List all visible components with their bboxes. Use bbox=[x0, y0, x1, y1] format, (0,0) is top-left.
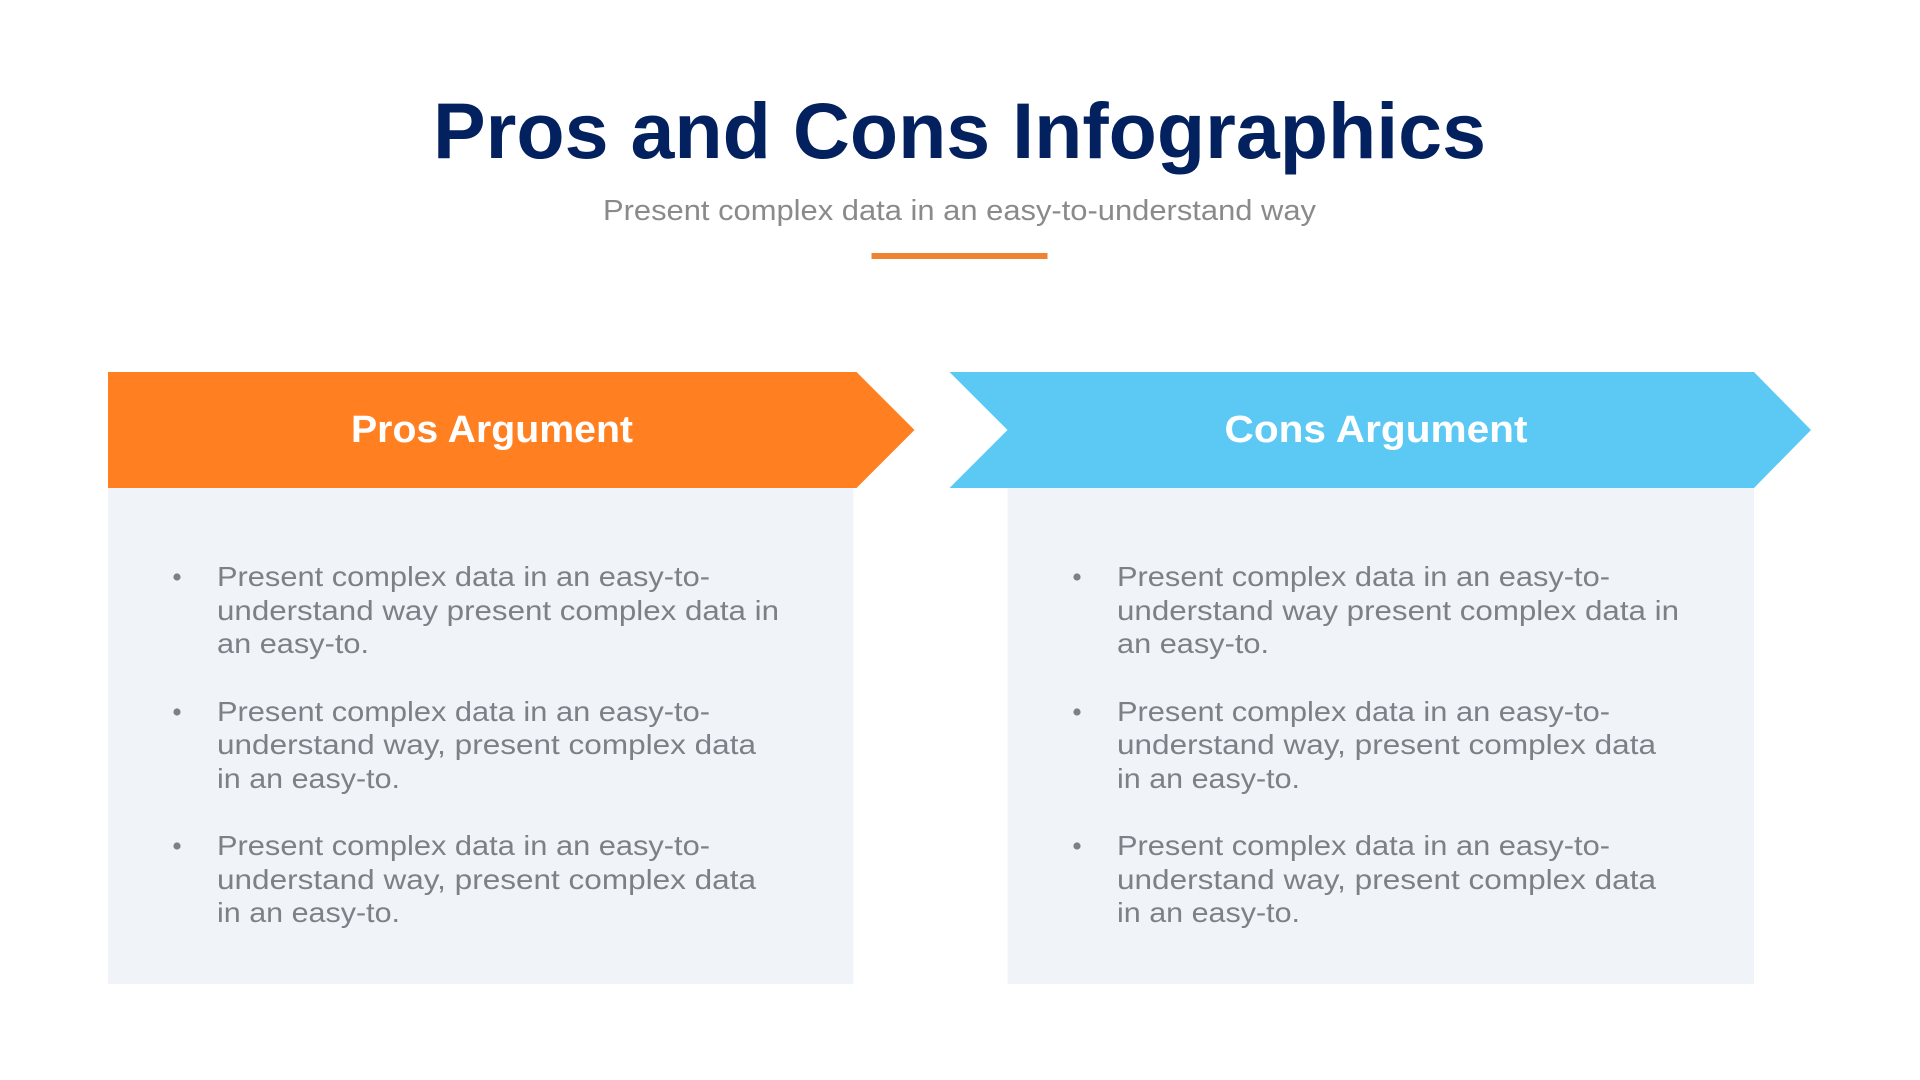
cons bullet 2 bbox=[1073, 696, 1656, 794]
cons bullet 3 bbox=[1073, 830, 1656, 928]
cons bullet 3: Present complex data in an easy-to- bbox=[1117, 830, 1610, 861]
pros body panel bbox=[108, 488, 854, 984]
cons bullet 1: an easy-to. bbox=[1117, 628, 1269, 659]
pros bullet 1: Present complex data in an easy-to- bbox=[217, 561, 710, 592]
pros arrow header bbox=[108, 372, 914, 488]
cons bullet 2: Present complex data in an easy-to- bbox=[1117, 696, 1610, 727]
pros bullet 2 bbox=[173, 696, 756, 794]
pros bullet 2: in an easy-to. bbox=[217, 763, 400, 794]
cons bullet 3: in an easy-to. bbox=[1117, 897, 1300, 928]
title underline accent bbox=[872, 253, 1048, 259]
pros bullet 1: understand way present complex data in bbox=[217, 595, 779, 626]
cons bullet 1 bbox=[1073, 561, 1679, 659]
cons bullet 1: Present complex data in an easy-to- bbox=[1117, 561, 1610, 592]
pros bullet 3 bbox=[173, 830, 756, 928]
pros bullet 1 bbox=[173, 561, 779, 659]
pros bullet 2: understand way, present complex data bbox=[217, 729, 756, 760]
pros heading: Pros Argument bbox=[351, 409, 633, 451]
pros bullet 3: Present complex data in an easy-to- bbox=[217, 830, 710, 861]
panel: pros bbox=[108, 372, 914, 984]
cons bullet 2: understand way, present complex data bbox=[1117, 729, 1656, 760]
cons arrow header bbox=[950, 372, 1811, 488]
pros bullet 2: Present complex data in an easy-to- bbox=[217, 696, 710, 727]
cons bullet 1: understand way present complex data in bbox=[1117, 595, 1679, 626]
cons body panel bbox=[1008, 488, 1754, 984]
cons bullet 3: understand way, present complex data bbox=[1117, 864, 1656, 895]
pros bullet 1: an easy-to. bbox=[217, 628, 369, 659]
subtitle: Present complex data in an easy-to-understand way bbox=[603, 195, 1317, 227]
panel: cons bbox=[950, 372, 1811, 984]
pros bullet 3: in an easy-to. bbox=[217, 897, 400, 928]
cons bullet 2: in an easy-to. bbox=[1117, 763, 1300, 794]
pros bullet 3: understand way, present complex data bbox=[217, 864, 756, 895]
title: Pros and Cons Infographics bbox=[433, 86, 1486, 175]
cons heading: Cons Argument bbox=[1224, 409, 1528, 451]
